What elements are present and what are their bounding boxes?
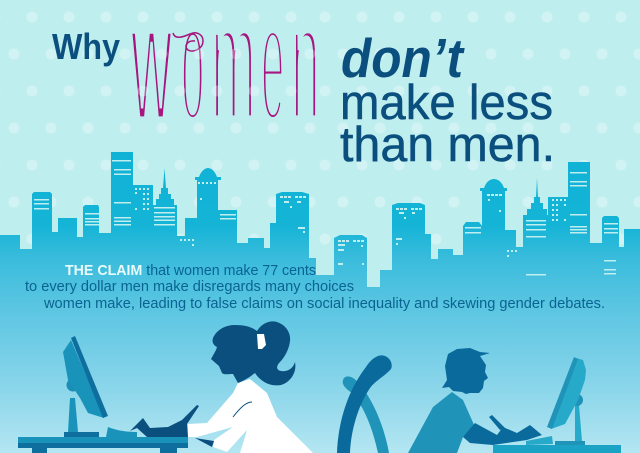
desk left [18, 437, 188, 453]
title: Why: Why [52, 26, 120, 67]
title: make less: make less [340, 76, 553, 130]
woman lower arm [195, 438, 214, 447]
right keyboard [526, 436, 553, 445]
desk right [493, 441, 621, 453]
woman arm fold [233, 402, 252, 417]
man arm [463, 423, 542, 445]
claim line 2: to every dollar men make disregards many choices [25, 278, 354, 295]
title: Women [131, 0, 320, 157]
icon: right monitor [547, 357, 586, 441]
claim paragraph [25, 262, 605, 312]
icon: keyboard [106, 427, 137, 437]
hair clip [257, 334, 266, 349]
man shirt [408, 392, 475, 453]
woman head and hair [211, 321, 295, 385]
claim line 3: women make, leading to false claims on social inequality and skewing gender debates. [43, 295, 605, 312]
skyline and lower background [0, 152, 640, 453]
woman at desk illustration [18, 321, 313, 453]
woman body [188, 379, 313, 453]
claim line 1: THE CLAIM that women make 77 cents [65, 262, 316, 279]
woman arm and pen [130, 405, 199, 437]
window details [34, 160, 618, 276]
man at desk illustration [337, 348, 621, 453]
title: don't: don’t [341, 27, 465, 89]
man head and hair [442, 348, 490, 394]
icon: pen [489, 415, 505, 430]
title: than men.: than men. [340, 118, 555, 172]
icon: chair [337, 355, 392, 453]
icon: left monitor [63, 336, 108, 437]
background dots [0, 12, 640, 244]
